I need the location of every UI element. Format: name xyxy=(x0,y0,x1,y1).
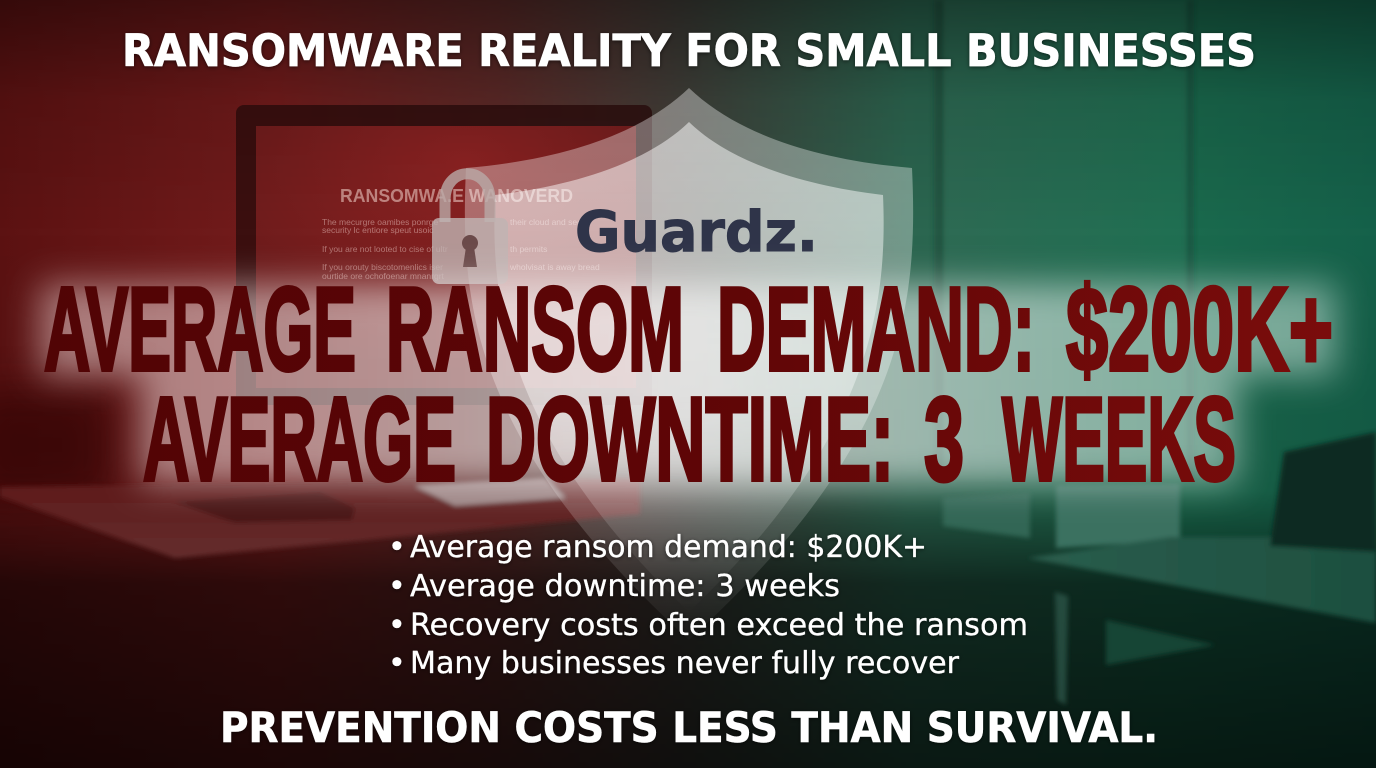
closing tagline: PREVENTION COSTS LESS THAN SURVIVAL. xyxy=(220,703,1158,752)
shield emblem xyxy=(465,88,913,640)
logo: Guardz: Guardz. xyxy=(575,200,818,265)
headline line 1: RANSOM xyxy=(386,263,684,396)
headline line 1 xyxy=(44,263,1333,396)
headline glow xyxy=(40,284,1336,484)
monitor with ransomware warning: The mecurgre oamibes ponrge xyxy=(322,217,439,227)
headline line 2: DOWNTIME: xyxy=(486,373,894,506)
desk and keyboard, left xyxy=(0,478,640,558)
headline line 2: 3 xyxy=(924,373,964,506)
headline line 2: AVERAGE xyxy=(143,373,456,506)
bullet list: • xyxy=(388,569,406,604)
bullet list: • xyxy=(388,608,406,643)
headline line 1: AVERAGE xyxy=(44,263,356,396)
monitor with ransomware warning: RANSOMWA.E WANOVERD xyxy=(340,186,573,206)
desk, chair and laptop, right xyxy=(943,432,1376,705)
monitor with ransomware warning: If you orouty biscotomenlics iser xyxy=(322,262,443,272)
bullet list: • xyxy=(388,530,406,565)
monitor with ransomware warning: their cloud and secur xyxy=(510,217,589,227)
headline line 1: DEMAND: xyxy=(717,263,1035,396)
office window columns xyxy=(934,0,1194,480)
monitor with ransomware warning: th permits xyxy=(510,244,547,254)
title: RANSOMWARE REALITY FOR SMALL BUSINESSES xyxy=(122,26,1256,77)
bullet list: Average ransom demand: $200K+ xyxy=(410,530,927,565)
monitor with ransomware warning: If you are not looted to cise of ultr xyxy=(322,244,448,254)
bullet list: Average downtime: 3 weeks xyxy=(410,569,840,604)
monitor with ransomware warning xyxy=(236,105,652,405)
bullet list: • xyxy=(388,646,406,681)
bullet list: Many businesses never fully recover xyxy=(410,646,960,681)
monitor with ransomware warning: wholvisat is away bread xyxy=(509,262,600,272)
headline line 2 xyxy=(143,373,1236,506)
bullet list: Recovery costs often exceed the ransom xyxy=(410,608,1028,643)
darker lower-left wall xyxy=(0,390,110,500)
headline: ransom demand and downtime xyxy=(40,263,1336,506)
icon: padlock xyxy=(432,174,508,284)
monitor with ransomware warning: ourtide ore ochofoenar mnanrgrt xyxy=(322,271,445,281)
bullet list xyxy=(388,530,1028,681)
monitor with ransomware warning: security lc entiore speut usoic xyxy=(322,225,434,235)
